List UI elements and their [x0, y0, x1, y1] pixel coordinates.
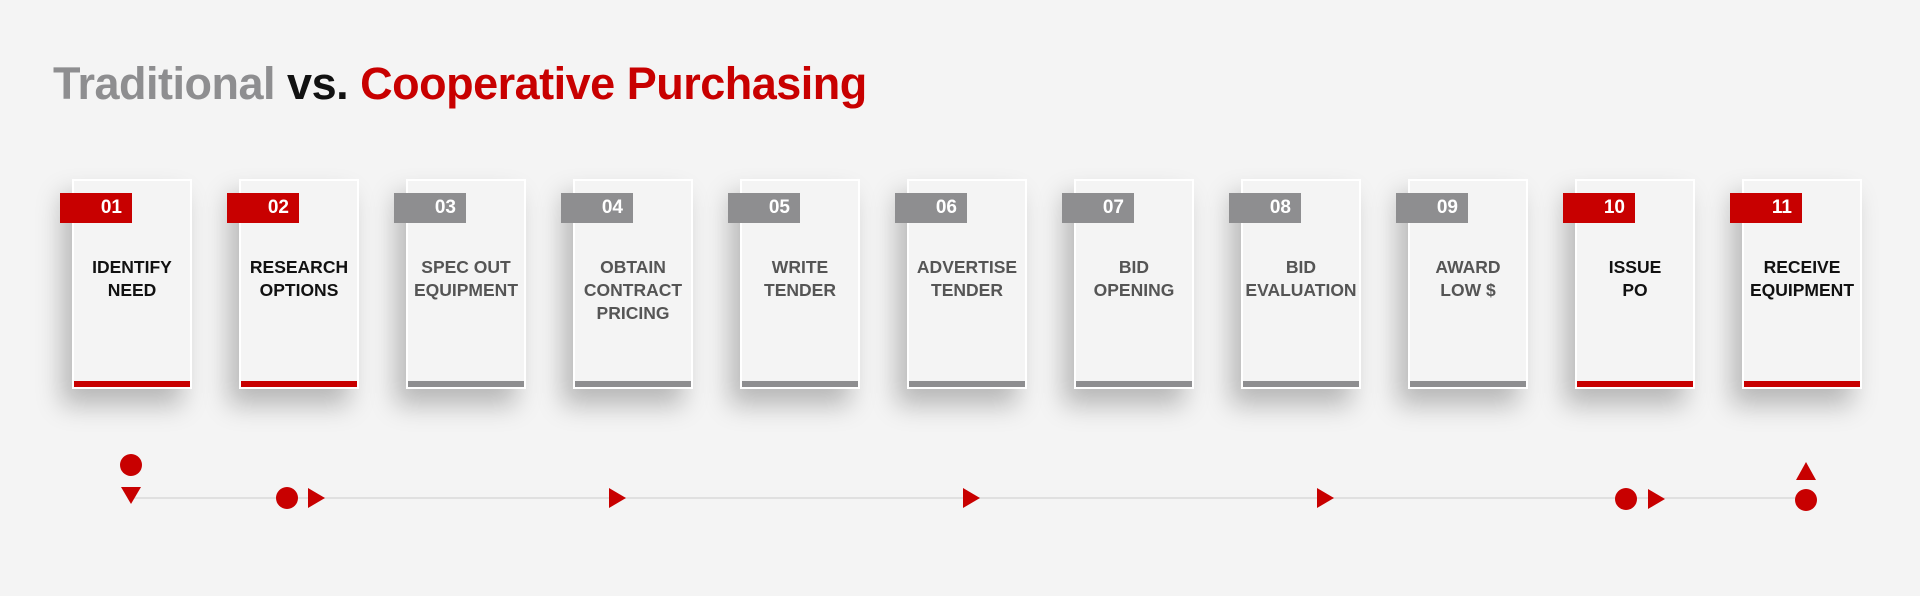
card 10: PO: [1622, 280, 1648, 300]
card 06: TENDER: [931, 280, 1003, 300]
title: Traditional vs. Cooperative Purchasing: [53, 58, 867, 109]
card 09: LOW $: [1440, 280, 1496, 300]
start markers: [120, 454, 142, 504]
card 01: NEED: [108, 280, 156, 300]
card 04: PRICING: [597, 303, 669, 323]
card 02: RESEARCH: [250, 257, 348, 277]
card 10: 10: [1604, 197, 1625, 218]
card 09: AWARD: [1435, 257, 1501, 277]
arrow: [1317, 488, 1334, 508]
card 05: 05: [769, 197, 790, 218]
card 01: [72, 179, 192, 389]
card 06: ADVERTISE: [917, 257, 1017, 277]
card 10: ISSUE: [1609, 257, 1661, 277]
card 04: CONTRACT: [584, 280, 682, 300]
card 02: [239, 179, 359, 389]
card 08: [1241, 179, 1361, 389]
arrow: [609, 488, 626, 508]
card 03: SPEC OUT: [421, 257, 511, 277]
card 09: [1408, 179, 1528, 389]
card 04: OBTAIN: [600, 257, 666, 277]
card 03: 03: [435, 197, 456, 218]
card 01: IDENTIFY: [92, 257, 172, 277]
card 11: [1742, 179, 1862, 389]
card 08: BID: [1286, 257, 1316, 277]
card 04: [573, 179, 693, 389]
card 06: [907, 179, 1027, 389]
card 08: 08: [1270, 197, 1291, 218]
card 06: 06: [936, 197, 957, 218]
card 08: EVALUATION: [1245, 280, 1357, 300]
arrow: [963, 488, 980, 508]
card 04: 04: [602, 197, 623, 218]
card 03: [406, 179, 526, 389]
card 11: EQUIPMENT: [1750, 280, 1854, 300]
card 10: [1575, 179, 1695, 389]
card 07: 07: [1103, 197, 1124, 218]
card 11: 11: [1772, 197, 1792, 218]
card 05: WRITE: [772, 257, 828, 277]
marker step 2: [276, 487, 325, 509]
card 05: [740, 179, 860, 389]
card 02: OPTIONS: [260, 280, 338, 300]
end markers: [1795, 462, 1817, 511]
card 11: RECEIVE: [1764, 257, 1840, 277]
card 07: OPENING: [1094, 280, 1174, 300]
card 03: EQUIPMENT: [414, 280, 518, 300]
card 07: [1074, 179, 1194, 389]
card 07: BID: [1119, 257, 1149, 277]
card 09: 09: [1437, 197, 1458, 218]
card 02: 02: [268, 197, 289, 218]
marker step 10: [1615, 488, 1665, 510]
card 01: 01: [101, 197, 122, 218]
card 05: TENDER: [764, 280, 836, 300]
